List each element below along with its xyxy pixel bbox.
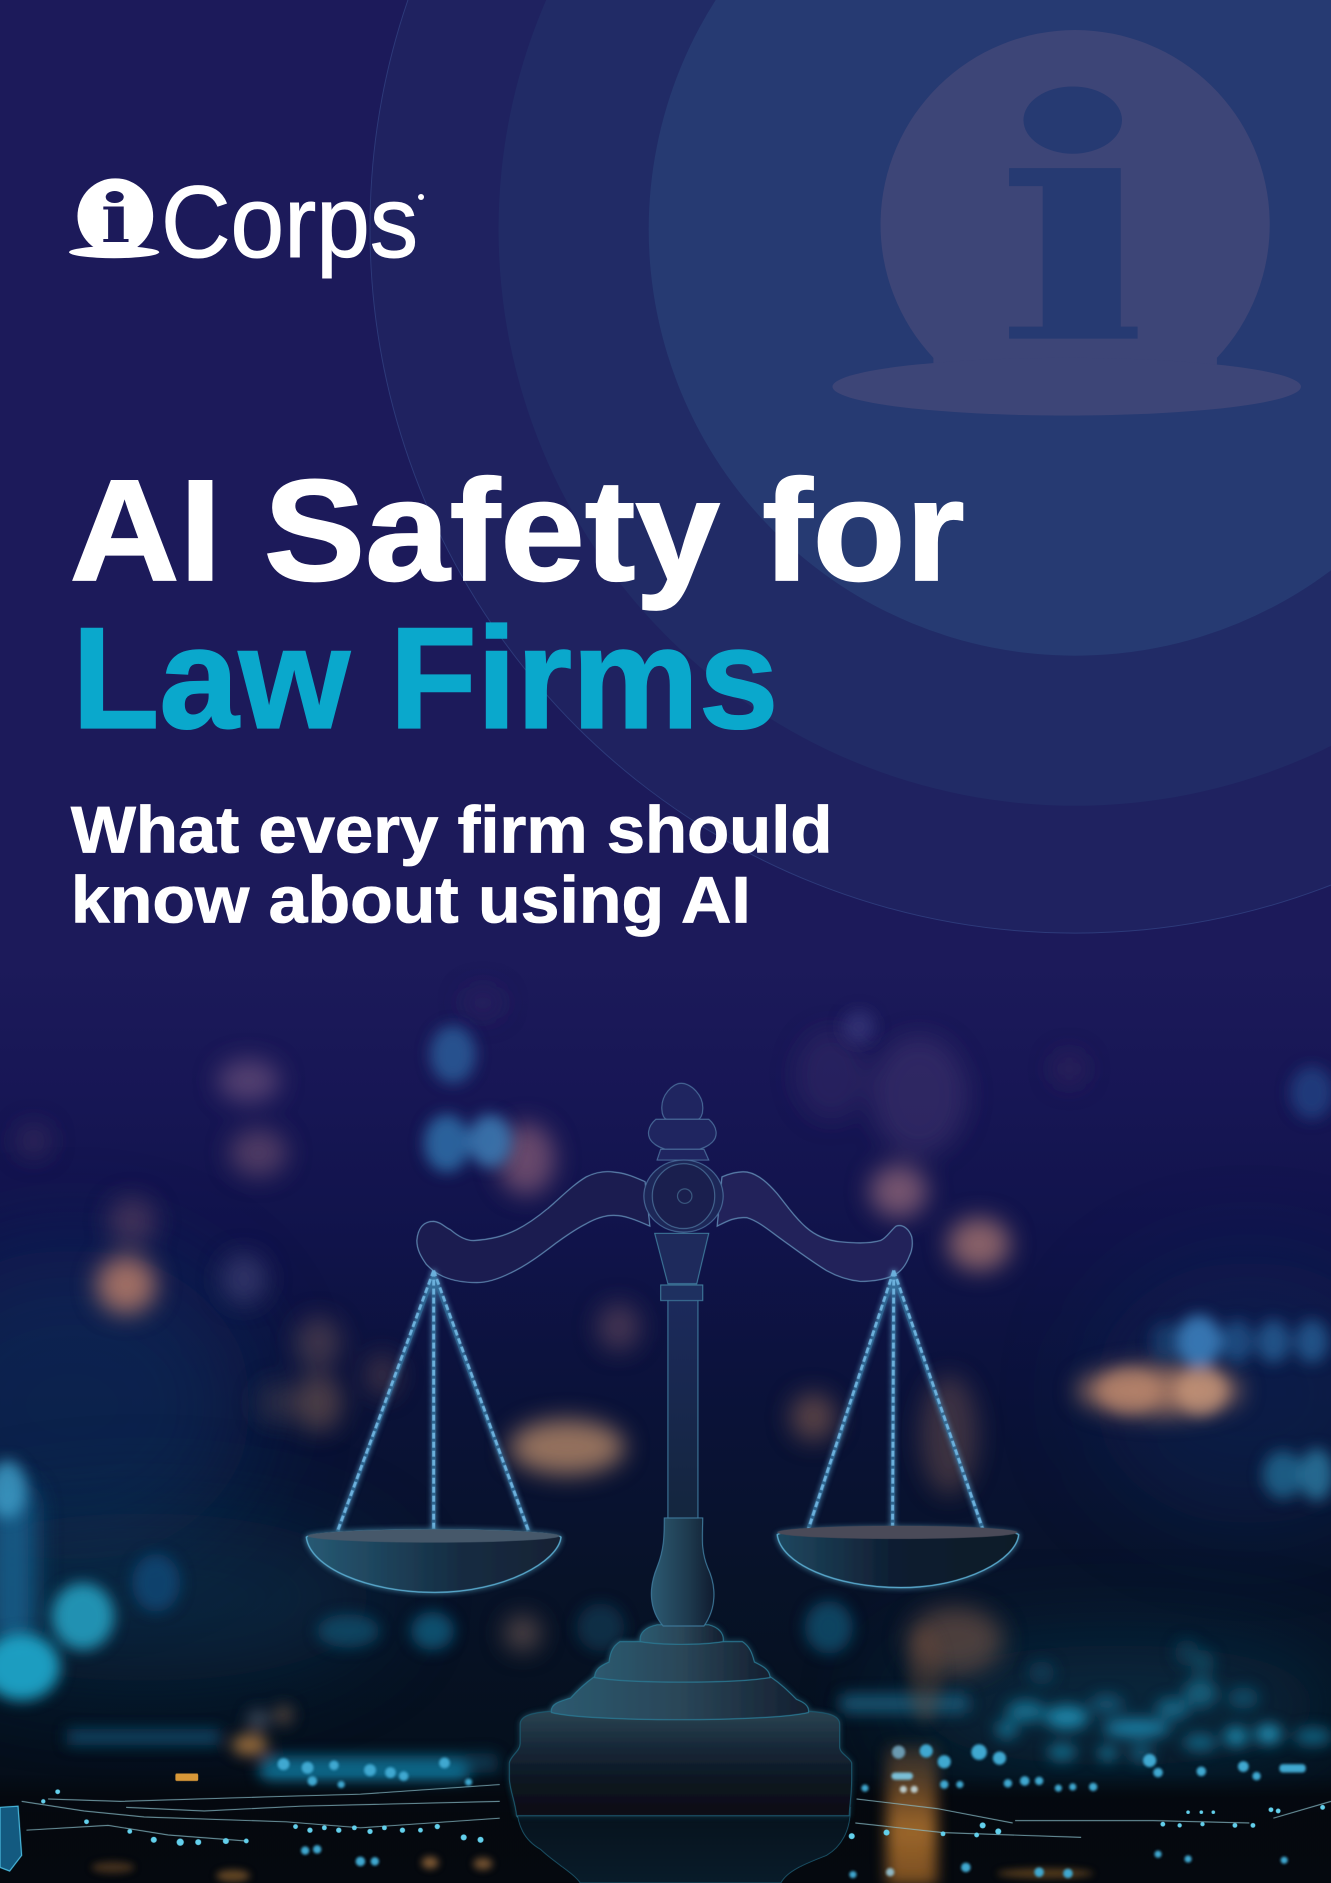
beam bbox=[417, 1172, 912, 1283]
subtitle: know about using AI bbox=[71, 862, 751, 936]
left blue band bbox=[67, 1729, 220, 1745]
scales of justice bbox=[306, 1083, 1019, 1883]
watermark: info icon bbox=[832, 30, 1301, 416]
stepped base bbox=[509, 1625, 852, 1816]
photo: blurred city lights bbox=[0, 986, 1331, 1785]
title: Law Firms bbox=[72, 598, 778, 759]
reflected orange light bbox=[887, 1746, 937, 1883]
title: AI Safety for bbox=[70, 450, 965, 611]
right blue blobs bbox=[840, 1693, 969, 1714]
finial and medallion bbox=[644, 1083, 723, 1232]
chains bbox=[338, 1271, 983, 1535]
right pan bbox=[777, 1526, 1019, 1588]
left shard bbox=[0, 1806, 22, 1871]
subtitle: What every firm should bbox=[71, 793, 832, 867]
logo wordmark: Corps bbox=[161, 165, 418, 279]
orange marker bbox=[175, 1774, 198, 1781]
concentric circles bbox=[370, 0, 1331, 933]
title bbox=[70, 450, 965, 759]
base reflection bbox=[517, 1807, 850, 1883]
network lines bbox=[22, 1785, 1331, 1841]
ground with circuit lights bbox=[0, 1744, 1331, 1883]
left pan bbox=[306, 1529, 561, 1592]
logo icon bbox=[69, 178, 159, 258]
post bbox=[651, 1233, 714, 1626]
subtitle bbox=[71, 793, 832, 936]
orange reflection upper bbox=[908, 1627, 942, 1723]
logo bbox=[69, 165, 424, 279]
sharp dots bbox=[41, 1789, 1325, 1846]
blurred dots bbox=[277, 1744, 1306, 1878]
